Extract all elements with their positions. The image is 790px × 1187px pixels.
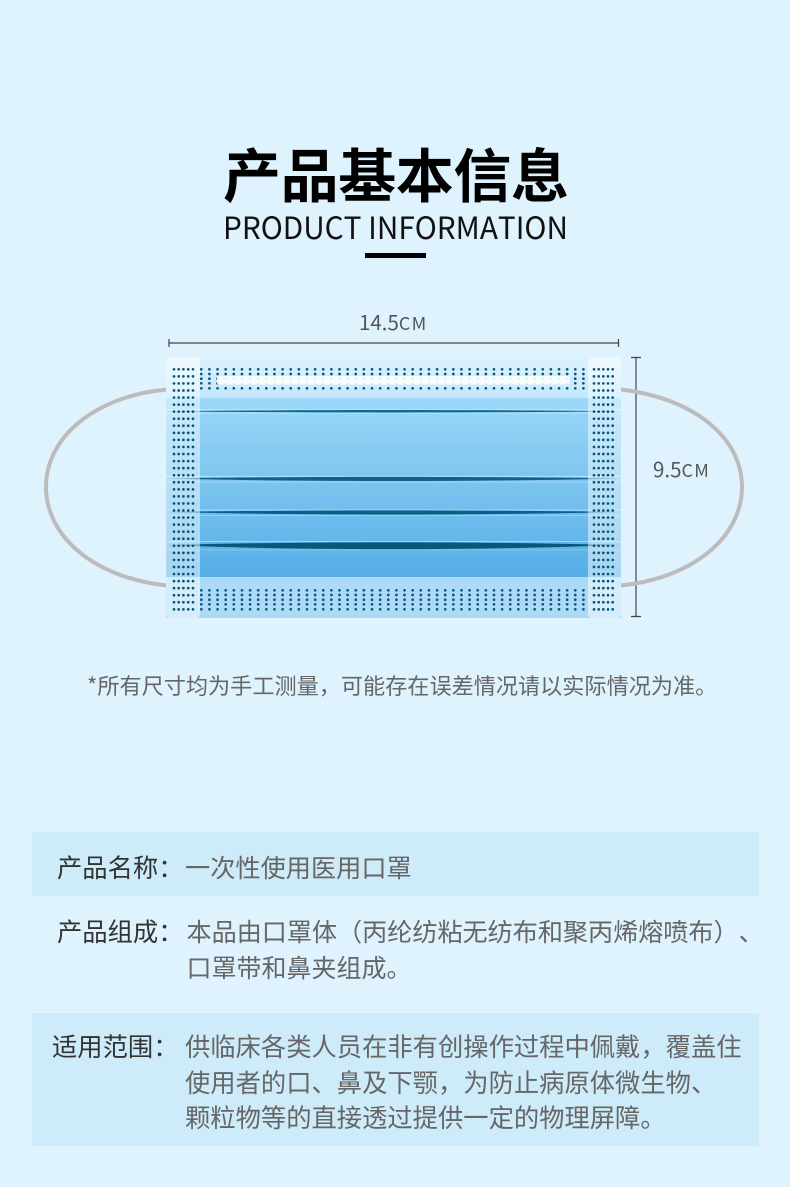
panel: scope of use: 供临床各类人员在非有创操作过程中佩戴，覆盖住 (185, 1028, 742, 1064)
icon: right ear loop (621, 390, 742, 586)
panel: product name (32, 832, 759, 896)
mask bottom strip (166, 577, 621, 618)
height dimension: 9.5CM (653, 453, 710, 483)
panel: product composition: 本品由口罩体（丙纶纺粘无纺布和聚丙烯熔喷布）、 (186, 913, 764, 949)
icon: left ear loop (46, 390, 167, 586)
height dimension (631, 358, 710, 616)
panel: scope of use (32, 1013, 759, 1146)
measurement footnote: *所有尺寸均为手工测量，可能存在误差情况请以实际情况为准。 (87, 669, 717, 701)
panel: product composition: 产品组成： (57, 913, 184, 949)
pleat 1 (166, 410, 621, 414)
icon: surgical mask (166, 357, 621, 618)
panel: scope of use: 适用范围： (52, 1028, 178, 1064)
right side dots (594, 369, 613, 610)
pleat 4 (166, 541, 621, 550)
panel: scope of use: 颗粒物等的直接透过提供一定的物理屏障。 (185, 1099, 666, 1135)
mask body (166, 398, 621, 578)
left side dots (174, 369, 193, 610)
top strip dots (201, 369, 586, 388)
subtitle: PRODUCT INFORMATION (223, 203, 568, 248)
pleat 2 (166, 476, 621, 482)
panel: product name: 产品名称： (57, 849, 184, 885)
bottom strip dots (201, 590, 586, 609)
mask top strip (166, 357, 621, 398)
width dimension: 14.5CM (359, 306, 428, 336)
title: 产品基本信息 (223, 130, 569, 214)
panel: scope of use: 使用者的口、鼻及下颚，为防止病原体微生物、 (185, 1064, 716, 1100)
width dimension (169, 306, 618, 347)
left side band (166, 357, 200, 618)
nose wire white bar (217, 376, 570, 384)
panel: product composition: 口罩带和鼻夹组成。 (186, 949, 412, 985)
heading underline bar (365, 253, 426, 258)
panel: product name: 一次性使用医用口罩 (185, 849, 412, 885)
right side band (588, 357, 621, 618)
panel: product composition (57, 913, 764, 985)
pleat 3 (166, 510, 621, 516)
